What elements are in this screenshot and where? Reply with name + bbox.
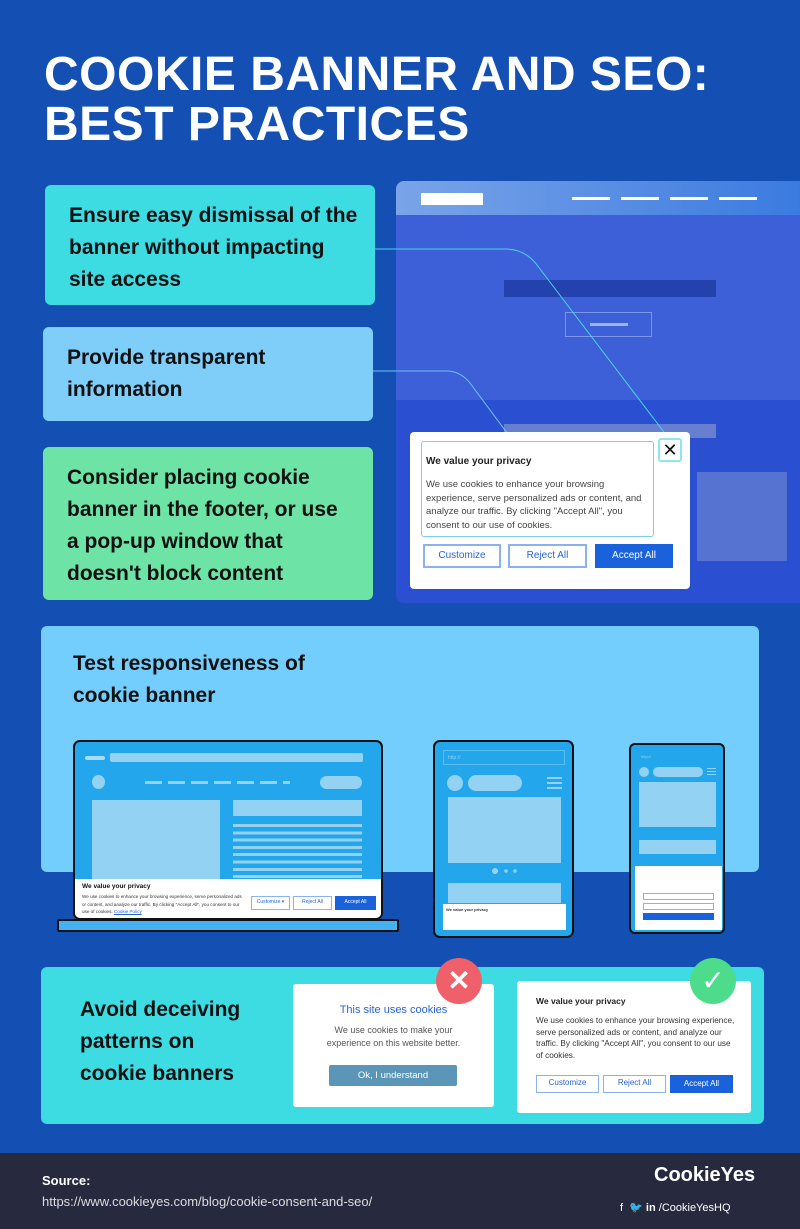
cookie banner popup: Reject All [527,550,568,561]
logo: CookieYes [654,1164,755,1186]
icon: green check: ✓ [701,965,725,996]
website mockup [396,181,800,603]
good example banner: We use cookies to enhance your browsing experience, serve personalized ads or content, and analyze our traffic. By clicking "Accept All", you consent to our use of cookies. [536,1016,734,1060]
panel: responsiveness: cookie banner [73,684,215,707]
good example banner: Reject All [618,1078,651,1087]
cookie banner popup: We use cookies to enhance your browsing experience, serve personalized ads or content, and analyze our traffic. By clicking "Accept All", you consent to our use of cookies. [426,479,641,530]
title: COOKIE BANNER AND SEO: [44,48,709,101]
good example banner [517,981,751,1113]
cookie banner popup: Accept All [612,550,656,561]
bad example banner: We use cookies to make your [335,1025,452,1035]
bad example banner [293,984,494,1107]
device: tablet [433,740,574,938]
source: Source: [42,1173,90,1188]
good example banner: Accept All [684,1079,719,1088]
panel: easy dismissal [45,185,375,305]
panel: transparent info [43,327,373,421]
panel: transparent info: information [67,378,182,401]
panel: easy dismissal: Ensure easy dismissal of the [69,204,357,227]
bad example banner: This site uses cookies [340,1004,447,1016]
panel: deceiving patterns: Avoid deceiving [80,998,240,1021]
device: phone [629,743,725,934]
panel: deceiving patterns: patterns on [80,1030,194,1053]
panel: transparent info: Provide transparent [67,346,265,369]
panel: footer placement: banner in the footer, or use [67,498,338,521]
panel: deceiving patterns [41,967,764,1124]
panel: responsiveness: Test responsiveness of [73,652,305,675]
footer: https://www.cookieyes.com/blog/cookie-consent-and-seo/ [42,1194,372,1209]
good example banner: Customize [549,1078,586,1087]
footer [0,1153,800,1229]
icon: close [658,438,682,462]
device: laptop: Customize ▾ [257,899,284,905]
device: laptop: Accept All [345,899,366,905]
device: laptop: Reject All [302,899,323,905]
title: BEST PRACTICES [44,98,470,151]
panel: footer placement: a pop-up window that [67,530,283,553]
cookie banner popup: Customize [438,550,486,561]
device: laptop: We value your privacy [82,883,151,890]
icon: close: ✕ [662,440,678,460]
title [44,48,709,151]
bad example banner: experience on this website better. [327,1038,460,1048]
device: laptop [57,740,399,932]
panel: footer placement: Consider placing cookie [67,466,310,489]
device: phone: http:// [641,754,651,759]
panel: easy dismissal: site access [69,268,181,291]
device: tablet: We value your privacy [446,907,488,912]
icon: red cross: ✕ [447,965,471,996]
icon: green check [690,958,736,1004]
device: tablet: http:// [448,755,461,761]
panel: easy dismissal: banner without impacting [69,236,324,259]
good example banner: We value your privacy [536,996,626,1006]
cookie banner popup: We value your privacy [426,456,531,467]
panel: deceiving patterns: cookie banners [80,1062,234,1085]
bad example banner: Ok, I understand [358,1070,428,1081]
icon: red cross [436,958,482,1004]
cookie banner popup [410,432,690,589]
connector lines [373,248,664,432]
panel: responsiveness [41,626,759,872]
device: laptop: We use cookies to enhance your browsing experience, serve personalized ads or content, and analyze our traffic. By clicking "Accept All", you consent to our use of cookies. Cookie Policy [82,894,242,914]
social: f 🐦 in /CookieYesHQ [620,1202,731,1214]
panel: footer placement [43,447,373,600]
panel: footer placement: doesn't block content [67,562,283,585]
